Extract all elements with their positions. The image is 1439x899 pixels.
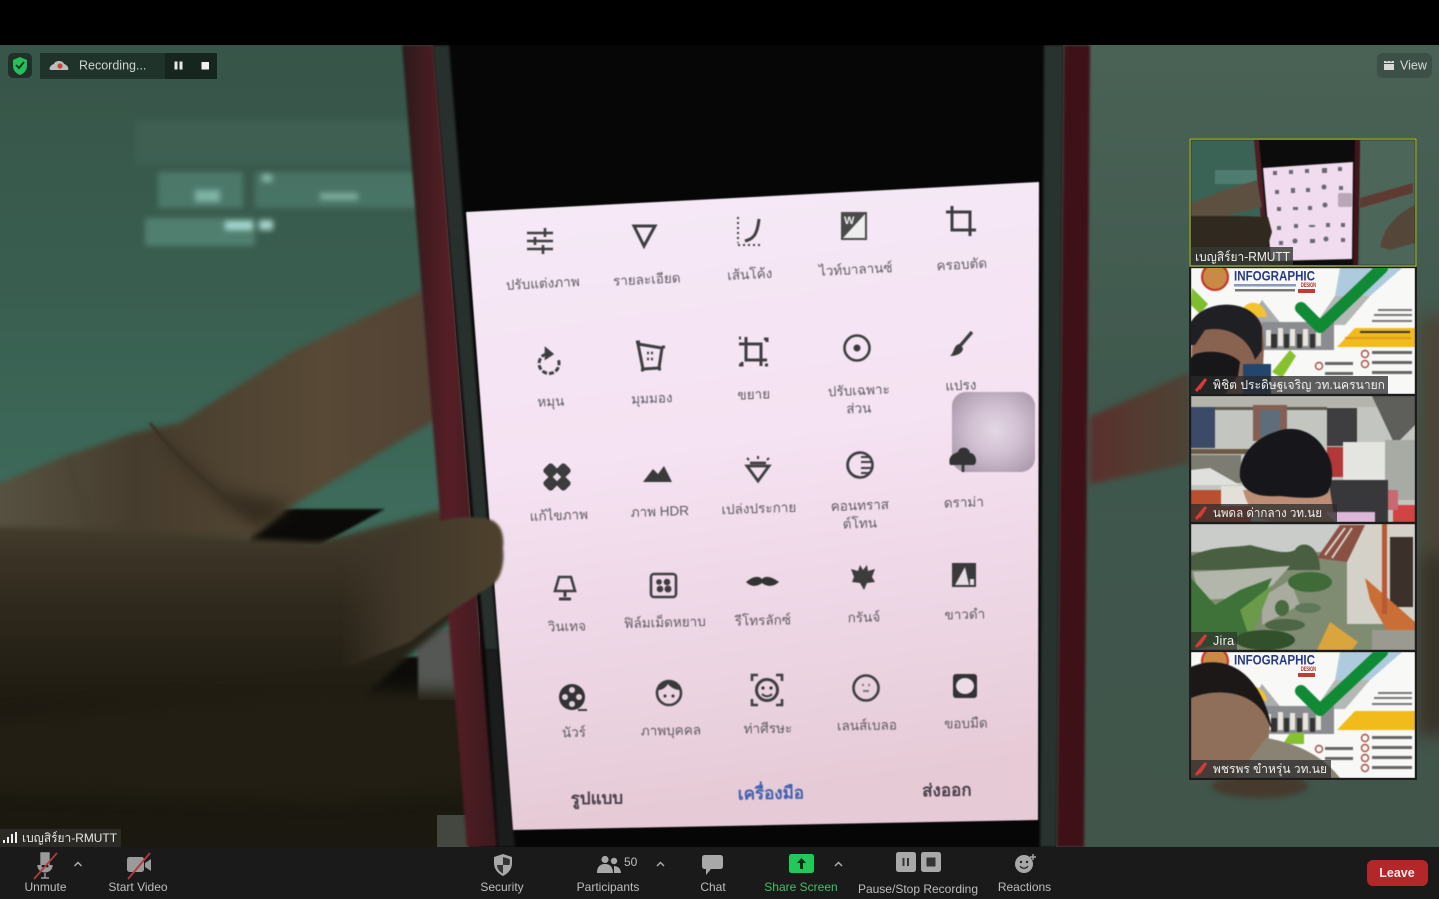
active speaker name tag: เบญสิร์ยา-RMUTT — [22, 831, 118, 845]
recording status bar: Recording... — [79, 58, 146, 72]
bottom toolbar — [0, 847, 1439, 899]
projected window reflection — [135, 120, 420, 246]
icon: curves — [738, 217, 762, 245]
icon: portrait face — [657, 681, 681, 705]
tool labels: ปรับเฉพาะ — [828, 382, 890, 399]
thumbnail: infographic poster with woman: INFOGRAPHIC — [1234, 652, 1315, 668]
icon: HDR mountains — [643, 466, 672, 482]
phone body — [402, 45, 1090, 847]
tool labels: ครอบตัด — [936, 256, 987, 273]
icon: drama cloud — [949, 448, 976, 472]
thumbnail: infographic poster with man: INFOGRAPHIC — [1234, 268, 1315, 284]
tool labels: หมุน — [537, 393, 565, 411]
tool labels: วินเทจ — [547, 619, 586, 635]
tool labels: เส้นโค้ง — [727, 265, 773, 283]
icon: white balance: W — [844, 215, 855, 227]
reactions button: Reactions — [998, 880, 1051, 894]
tool labels: มุมมอง — [631, 390, 673, 408]
start video button — [108, 853, 168, 894]
tool labels: แปรง — [945, 377, 977, 394]
left hand holding the phone — [0, 290, 498, 847]
icon grid row 4 — [555, 563, 976, 599]
icon: pause — [174, 62, 182, 70]
top black bar — [0, 0, 1439, 45]
pause stop recording button: Pause/Stop Recording — [858, 882, 978, 896]
tool labels: ภาพบุคคล — [641, 722, 701, 740]
security shield badge — [8, 53, 32, 78]
bottom tabs: รูปแบบ — [571, 789, 623, 810]
icon: noir film reel — [559, 684, 587, 710]
tool labels: ไวท์บาลานซ์ — [818, 259, 893, 279]
man with mask — [1191, 305, 1271, 394]
icon: perspective — [636, 342, 665, 370]
tool labels: ดราม่า — [944, 494, 984, 511]
name label: presenter: เบญสิร์ยา-RMUTT — [1195, 250, 1290, 264]
muted mic icon — [1196, 379, 1206, 391]
participant thumbnails strip — [1189, 138, 1417, 780]
name label: พิชิต ประดิษฐเจริญ วท.นครนายก — [1213, 378, 1385, 392]
name label: Jira — [1213, 634, 1234, 648]
view button: View — [1400, 58, 1428, 72]
icon: glamour — [747, 456, 769, 481]
tool labels: ขาวดำ — [944, 606, 985, 623]
icon: stop — [202, 62, 209, 70]
unmute button: Unmute — [24, 880, 67, 894]
check mark — [1301, 268, 1382, 327]
share screen button — [764, 854, 838, 894]
name label: นพดล ด่ากลาง วท.นย — [1213, 506, 1322, 520]
icon: grainy film — [651, 574, 676, 597]
phone screen: Snapseed tools — [466, 182, 1039, 830]
recording status bar — [40, 53, 217, 79]
tool labels: คอนทราส — [830, 497, 889, 514]
participants button: Participants — [577, 880, 639, 894]
tool labels: ท่าศีรษะ — [744, 721, 792, 736]
tool labels: ต์โทน — [842, 514, 877, 532]
thumbnail: room with man — [1191, 396, 1415, 522]
participants button: 50 — [624, 855, 638, 869]
woman — [1191, 662, 1340, 778]
icon: selective — [844, 336, 870, 360]
active speaker name tag — [0, 829, 121, 847]
view button — [1377, 53, 1432, 78]
pause stop recording button — [858, 852, 978, 896]
icon: expand — [739, 337, 768, 366]
chat button — [700, 855, 726, 894]
check mark — [1301, 652, 1382, 710]
tool labels — [506, 256, 988, 740]
reactions button — [998, 854, 1051, 894]
icon: recording cloud — [50, 61, 68, 70]
tool labels: รีโทรลักซ์ — [734, 611, 791, 629]
icon: crop — [946, 206, 976, 236]
tool labels: กรันจ์ — [847, 609, 880, 625]
bottom tabs — [571, 780, 972, 810]
tool labels: ขยาย — [737, 386, 770, 403]
tool labels: ปรับแต่งภาพ — [506, 274, 580, 293]
thumbnail: infographic poster with man: DESIGN — [1301, 282, 1316, 289]
leave button: Leave — [1379, 866, 1415, 880]
chevron — [657, 862, 664, 866]
tool labels: เลนส์เบลอ — [837, 716, 897, 734]
leave button — [1367, 860, 1428, 886]
thumbnail: infographic poster with woman — [1191, 648, 1415, 778]
icon: black and white — [952, 563, 976, 587]
icon: moustache — [746, 577, 779, 586]
name label: พชรพร ขำหรุ่น วท.นย — [1213, 762, 1327, 777]
bottom tabs: ส่งออก — [922, 781, 972, 800]
tool labels: นัวร์ — [562, 724, 586, 740]
chevron — [835, 862, 842, 866]
tool labels: เปล่งประกาย — [721, 500, 796, 517]
icon grid row 5 — [559, 674, 977, 710]
floating blurred button — [952, 392, 1035, 472]
tool labels: ภาพ HDR — [630, 503, 690, 520]
icon: white balance — [841, 212, 867, 240]
start video button: Start Video — [108, 880, 168, 894]
icon: vintage lamp — [555, 577, 575, 599]
bottom tabs: เครื่องมือ — [738, 780, 804, 804]
thumbnail: river landscape — [1191, 524, 1415, 650]
thumbnail: infographic poster with woman: DESIGN — [1301, 666, 1316, 673]
icon: rotate — [539, 349, 559, 374]
tool labels: ฟิล์มเม็ดหยาบ — [624, 612, 706, 631]
icon: grunge — [851, 565, 875, 590]
icon: brush — [950, 332, 972, 356]
thumb overlapping screen edge — [340, 517, 503, 670]
right hand finger behind phone — [1090, 315, 1439, 798]
icon grid row 1 — [527, 206, 976, 254]
participants button — [577, 855, 639, 894]
icon grid row 3 — [536, 448, 976, 498]
icon: lens blur — [854, 676, 878, 700]
tool labels: ขอบมืด — [944, 716, 988, 731]
tool labels: ส่วน — [846, 400, 872, 417]
security button — [480, 854, 524, 894]
icon: adjust sliders — [527, 228, 553, 254]
icon grid row 2 — [539, 332, 972, 374]
unmute button — [24, 853, 67, 894]
icon: vignette — [953, 674, 977, 698]
tool labels: แก้ไขภาพ — [529, 507, 588, 524]
chevron — [74, 862, 82, 866]
thumbnail: infographic poster with man — [1191, 264, 1415, 394]
chat button: Chat — [700, 880, 726, 894]
icon: details triangle — [634, 226, 655, 246]
icon: tonal contrast — [848, 452, 872, 478]
share screen button: Share Screen — [764, 880, 838, 894]
thumbnail: presenter — [1191, 140, 1415, 265]
security button: Security — [480, 880, 524, 894]
tool labels: รายละเอียด — [613, 270, 681, 289]
icon: head pose — [752, 675, 782, 705]
icon: healing — [536, 456, 578, 498]
